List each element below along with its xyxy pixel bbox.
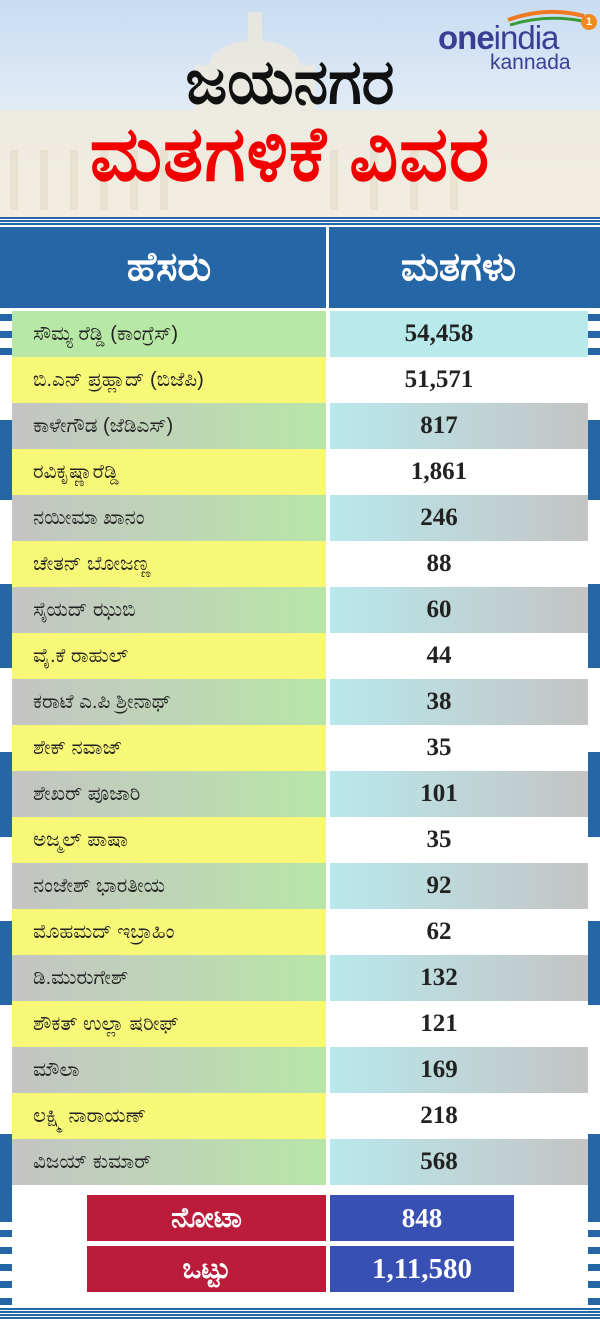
NOTA row: ನೋಟಾ [171, 1202, 242, 1233]
table rows: 38 [426, 688, 452, 715]
table rows: ಕರಾಟೆ ಎ.ಪಿ ಶ್ರೀನಾಥ್ [33, 691, 171, 713]
table rows: ಡಿ.ಮುರುಗೇಶ್ [33, 967, 128, 989]
table rows: ಕಾಳೇಗೌಡ (ಜೆಡಿಎಸ್) [33, 415, 173, 437]
table rows: 169 [420, 1056, 458, 1083]
decorative lines [0, 217, 600, 226]
table rows: 54,458 [405, 320, 473, 347]
table rows: 121 [420, 1010, 458, 1037]
table rows: ಅಜ್ಮಲ್ ಪಾಷಾ [33, 829, 128, 851]
table rows: ರವಿಕೃಷ್ಣಾರೆಡ್ಡಿ [33, 461, 119, 483]
table rows: 88 [426, 550, 452, 577]
table rows: ಮೊಹಮದ್ ಇಬ್ರಾಹಿಂ [33, 921, 174, 943]
table rows: 35 [426, 734, 452, 761]
table rows: ಶೌಕತ್ ಉಲ್ಲಾ ಷರೀಫ್ [33, 1013, 179, 1035]
table rows: ಸೈಯದ್ ಝುಬಿ [33, 599, 136, 621]
table rows: 35 [426, 826, 452, 853]
table rows: 218 [420, 1102, 458, 1129]
table rows: 1,861 [411, 458, 467, 485]
total row: 1,11,580 [372, 1253, 472, 1285]
table rows: 51,571 [405, 366, 473, 393]
table rows: 60 [426, 596, 452, 623]
table rows: ಮೌಲಾ [33, 1059, 79, 1081]
side decorations [0, 314, 600, 1305]
title line 2: ಮತಗಳಿಕೆ ವಿವರ [90, 112, 490, 197]
table rows: 92 [426, 872, 452, 899]
table rows: ಸೌಮ್ಯ ರೆಡ್ಡಿ (ಕಾಂಗ್ರೆಸ್) [33, 323, 178, 345]
table rows: 817 [420, 412, 458, 439]
table rows: ನಂಜೇಶ್ ಭಾರತೀಯ [33, 875, 165, 897]
table rows: 44 [426, 642, 452, 669]
table header: ಹೆಸರು [127, 245, 211, 289]
table header [0, 227, 600, 308]
table rows: 568 [420, 1148, 458, 1175]
table rows: ಬಿ.ಎನ್ ಪ್ರಹ್ಲಾದ್ (ಬಿಜೆಪಿ) [33, 369, 204, 391]
NOTA row [87, 1195, 514, 1241]
table rows: 101 [420, 780, 458, 807]
table rows: 246 [420, 504, 458, 531]
total row: ಒಟ್ಟು [182, 1253, 231, 1284]
logo: oneindia kannada [438, 10, 597, 74]
logo: oneindia kannada: oneindia [438, 19, 558, 56]
table rows: ವೈ.ಕೆ ರಾಹುಲ್ [33, 645, 128, 667]
logo: oneindia kannada: kannada [490, 51, 571, 74]
header background [0, 0, 600, 218]
table rows: ವಿಜಯ್ ಕುಮಾರ್ [33, 1151, 151, 1173]
logo: oneindia kannada: 1 [586, 16, 592, 28]
table header: ಮತಗಳು [401, 245, 516, 289]
table rows: ಲಕ್ಷ್ಮಿ ನಾರಾಯಣ್ [33, 1105, 146, 1127]
table rows [12, 311, 588, 1185]
total row [87, 1246, 514, 1292]
table rows: ನಯೀಮಾ ಖಾನಂ [33, 507, 145, 529]
table rows: ಶೇಖರ್ ಪೂಜಾರಿ [33, 783, 140, 805]
table rows: 62 [426, 918, 452, 945]
NOTA row: 848 [402, 1203, 442, 1233]
table rows: 132 [420, 964, 458, 991]
table rows: ಚೇತನ್ ಬೋಜಣ್ಣ [33, 553, 150, 575]
table rows: ಶೇಕ್ ನವಾಜ್ [33, 737, 122, 759]
title line 1: ಜಯನಗರ [186, 48, 394, 117]
